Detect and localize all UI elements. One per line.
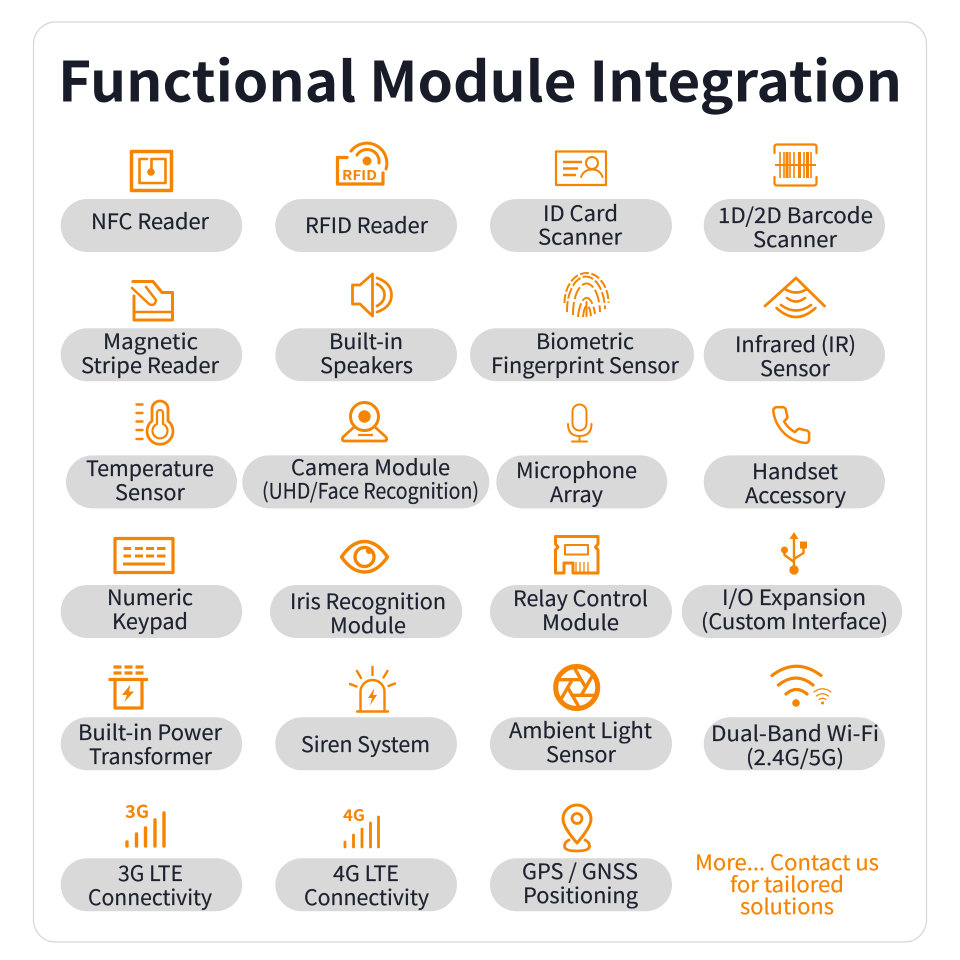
- icon: ID card: [556, 152, 606, 185]
- label: Temperature Sensor: Sensor: [115, 477, 186, 507]
- module: RFID Reader: [275, 143, 457, 252]
- icon: location pin: [563, 805, 591, 851]
- label: Camera Module: [242, 452, 489, 508]
- callout: contact us: solutions: [740, 891, 834, 921]
- callout: contact us: for tailored: [730, 869, 844, 899]
- icon: USB: [781, 532, 807, 575]
- label: 4G LTE Connectivity: 4G LTE: [333, 858, 399, 888]
- label: 3G LTE Connectivity: Connectivity: [88, 882, 212, 912]
- label: 1D/2D Barcode Scanner: Scanner: [753, 224, 838, 254]
- label: Iris Recognition Module: Module: [330, 610, 406, 640]
- icon: barcode: [774, 144, 816, 186]
- module: Built-in Power Transformer: [61, 667, 242, 771]
- module: 3G LTE Connectivity: [61, 798, 242, 912]
- label: 3G LTE Connectivity: 3G LTE: [118, 858, 183, 888]
- label: Microphone Array: Microphone: [516, 455, 637, 485]
- label: 1D/2D Barcode Scanner: 1D/2D Barcode: [718, 200, 873, 230]
- module: Built-in Speakers: [275, 274, 457, 381]
- label: Handset Accessory: [704, 455, 885, 510]
- label: I/O Expansion: (Custom Interface): [701, 606, 888, 636]
- label: Microphone Array: [496, 455, 667, 509]
- module: Numeric Keypad: [61, 538, 242, 638]
- module: Iris Recognition Module: [270, 542, 462, 640]
- module: GPS / GNSS Positioning: [490, 805, 672, 911]
- label: Dual-Band Wi-Fi: (2.4G/5G): [746, 742, 844, 772]
- callout: contact us: More... Contact us: [695, 847, 879, 877]
- module: Ambient Light Sensor: [490, 666, 672, 770]
- label: 3G LTE Connectivity: [61, 858, 242, 912]
- label: Iris Recognition Module: [270, 585, 462, 640]
- icon: 4G signal: 4G: [343, 802, 365, 826]
- icon: RFID: RFID: [342, 164, 377, 184]
- module: Handset Accessory: [704, 407, 885, 510]
- label: Built-in Power Transformer: [61, 717, 242, 771]
- label: Siren System: [275, 717, 457, 770]
- icon: siren: [350, 667, 395, 712]
- label: NFC Reader: [61, 199, 242, 252]
- label: Siren System: Siren System: [301, 729, 430, 759]
- module: Microphone Array: [496, 404, 667, 509]
- icon: keypad: [115, 538, 173, 572]
- icon: speaker: [352, 274, 392, 316]
- label: GPS / GNSS Positioning: [490, 856, 672, 911]
- label: Magnetic Stripe Reader: [61, 326, 242, 381]
- label: 4G LTE Connectivity: [275, 858, 457, 912]
- label: Infrared Sensor: Sensor: [760, 353, 831, 383]
- module: 4G LTE Connectivity: [275, 802, 457, 912]
- label: Handset Accessory: Accessory: [745, 480, 846, 510]
- label: Magnetic Stripe Reader: Stripe Reader: [81, 350, 220, 380]
- label: Numeric Keypad: Keypad: [112, 606, 188, 636]
- label: I/O Expansion: I/O Expansion: [722, 582, 866, 612]
- label: Temperature Sensor: Temperature: [86, 453, 214, 483]
- label: GPS / GNSS Positioning: Positioning: [523, 880, 638, 910]
- label: Built-in Speakers: Built-in: [329, 326, 403, 356]
- label: Numeric Keypad: [61, 582, 242, 638]
- icon: fingerprint: [564, 273, 608, 317]
- icon: 3G signal: 3G: [125, 798, 149, 824]
- icon: phone handset: [773, 407, 809, 443]
- callout: contact us: [695, 847, 879, 921]
- label: ID Card Scanner: [490, 198, 672, 252]
- label: Built-in Power Transformer: Transformer: [89, 741, 213, 771]
- label: Ambient Light Sensor: Sensor: [546, 739, 617, 769]
- module: Infrared Sensor: [704, 278, 885, 383]
- label: Iris Recognition Module: Iris Recognition: [290, 586, 446, 616]
- label: Dual-Band Wi-Fi: [704, 717, 885, 772]
- label: I/O Expansion: [682, 582, 902, 638]
- icon: thermometer: [136, 401, 173, 444]
- label: Relay Control Module: Relay Control: [513, 583, 648, 613]
- module: Siren System: [275, 667, 457, 770]
- label: Biometric Fingerprint Sensor: [470, 326, 694, 381]
- label: Built-in Power Transformer: Built-in Power: [78, 717, 223, 747]
- label: Magnetic Stripe Reader: Magnetic: [103, 326, 198, 356]
- label: Biometric Fingerprint Sensor: Biometric: [536, 326, 634, 356]
- label: 4G LTE Connectivity: Connectivity: [304, 882, 429, 912]
- label: Infrared Sensor: [704, 328, 885, 383]
- label: Numeric Keypad: Numeric: [107, 582, 193, 612]
- label: Dual-Band Wi-Fi: Dual-Band Wi-Fi: [711, 718, 879, 748]
- label: GPS / GNSS Positioning: GPS / GNSS: [522, 856, 638, 886]
- label: Built-in Speakers: Speakers: [320, 350, 413, 380]
- icon: microphone: [568, 404, 592, 442]
- label: ID Card Scanner: Scanner: [538, 222, 623, 252]
- label: Relay Control Module: [490, 583, 672, 638]
- label: Relay Control Module: Module: [542, 607, 619, 637]
- icon: 3G signal: [125, 798, 164, 846]
- label: RFID Reader: [275, 199, 457, 252]
- module: ID Card Scanner: [490, 152, 672, 252]
- label: Microphone Array: Array: [550, 479, 603, 509]
- label: 1D/2D Barcode Scanner: [704, 199, 885, 254]
- icon: RFID: [338, 143, 387, 184]
- icon: card swipe: [132, 282, 172, 320]
- icon: aperture: [556, 666, 598, 708]
- module: NFC Reader: [61, 152, 242, 252]
- label: Ambient Light Sensor: [490, 715, 672, 770]
- label: ID Card Scanner: ID Card: [543, 198, 618, 228]
- module: Magnetic Stripe Reader: [61, 282, 242, 381]
- module: Camera Module: [242, 402, 489, 508]
- label: Infrared Sensor: Infrared (IR): [735, 329, 856, 359]
- label: Handset Accessory: Handset: [752, 456, 838, 486]
- title: Functional Module Integration: [58, 38, 902, 118]
- module: I/O Expansion: [682, 532, 902, 638]
- module: Relay Control Module: [490, 536, 672, 638]
- icon: transformer: [108, 667, 148, 708]
- module: Temperature Sensor: [66, 401, 237, 508]
- icon: webcam: [342, 402, 387, 441]
- module: 1D/2D Barcode Scanner: [704, 144, 885, 254]
- label: Biometric Fingerprint Sensor: Fingerprint Sensor: [491, 350, 680, 380]
- icon: NFC tag: [132, 152, 172, 190]
- label: Camera Module: Camera Module: [291, 452, 450, 482]
- module: Biometric Fingerprint Sensor: [470, 273, 694, 381]
- label: Temperature Sensor: [66, 453, 237, 508]
- icon: infrared waves: [765, 278, 824, 317]
- label: NFC Reader: NFC Reader: [91, 206, 210, 236]
- icon: wifi: [772, 666, 831, 707]
- label: Camera Module: (UHD/Face Recognition): [262, 476, 479, 506]
- module: Dual-Band Wi-Fi: [704, 666, 885, 772]
- icon: eye: [342, 542, 388, 572]
- icon: relay board: [556, 536, 598, 573]
- label: Ambient Light Sensor: Ambient Light: [509, 715, 652, 745]
- label: Built-in Speakers: [275, 326, 457, 381]
- label: RFID Reader: RFID Reader: [305, 210, 429, 240]
- icon: 4G signal: [343, 802, 378, 847]
